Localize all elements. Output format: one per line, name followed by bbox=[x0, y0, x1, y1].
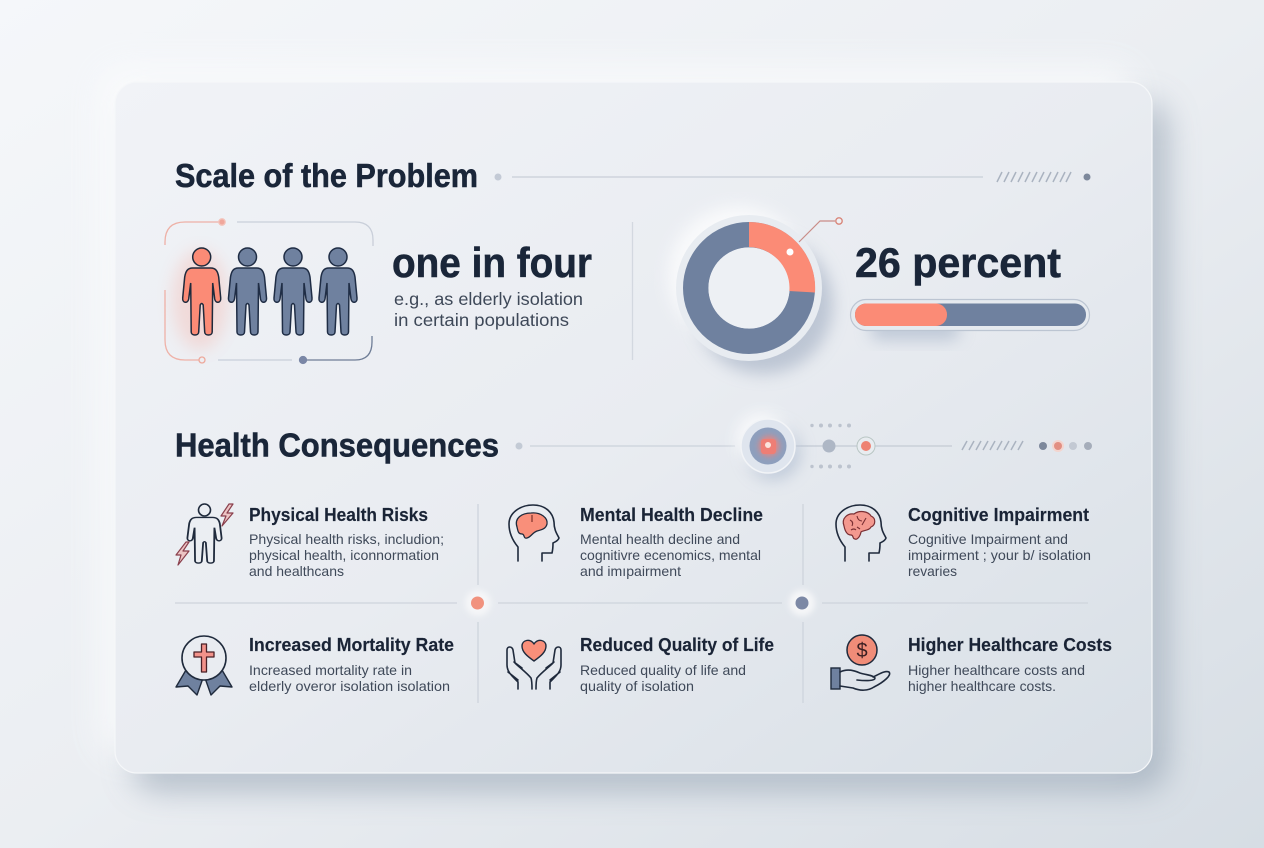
item description: impairment ; your b/ isolation bbox=[908, 547, 1091, 563]
item description bbox=[249, 531, 444, 579]
item description: elderly overor isolation isolation bbox=[249, 678, 450, 694]
item: Increased Mortality Rate bbox=[176, 635, 454, 695]
item title: Cognitive Impairment bbox=[908, 505, 1089, 525]
stat: 26 percent: 26 percent bbox=[855, 239, 1061, 286]
item description: Increased mortality rate in bbox=[249, 662, 412, 678]
icon: head with brain bbox=[509, 505, 559, 561]
item title: Mental Health Decline bbox=[580, 505, 763, 525]
item description: cognitivre ecenomics, mental bbox=[580, 547, 761, 563]
item: Reduced Quality of Life bbox=[507, 635, 774, 694]
item description: Physical health risks, includion; bbox=[249, 531, 444, 547]
item description bbox=[249, 662, 450, 694]
node: slate bbox=[789, 590, 815, 616]
heading: Health Consequences: Health Consequences bbox=[175, 426, 499, 464]
item description: and imıpairment bbox=[580, 563, 681, 579]
item description bbox=[908, 531, 1091, 579]
pictogram frame bbox=[165, 219, 373, 364]
icon: knob bbox=[737, 414, 800, 479]
item description: Reduced quality of life and bbox=[580, 662, 746, 678]
stat description: in certain populations bbox=[394, 310, 569, 330]
icon: hand with dollar coin bbox=[831, 635, 890, 690]
person highlighted bbox=[183, 248, 221, 335]
icon: hands holding heart bbox=[507, 640, 561, 689]
item description bbox=[580, 531, 761, 579]
leader line bbox=[786, 218, 842, 256]
item title: Higher Healthcare Costs bbox=[908, 635, 1112, 655]
icon: person with lightning bolts bbox=[176, 504, 233, 565]
header rule with knob and dots bbox=[516, 414, 1092, 479]
donut chart: 26 percent bbox=[668, 206, 842, 374]
coral slice bbox=[749, 222, 815, 292]
icon: ribbon badge with cross bbox=[176, 636, 232, 695]
item: Mental Health Decline bbox=[509, 505, 763, 579]
stat description bbox=[394, 289, 583, 330]
item description: revaries bbox=[908, 563, 957, 579]
item description: physical health, iconnormation bbox=[249, 547, 439, 563]
person slate 2 bbox=[274, 248, 312, 335]
progress bar bbox=[850, 300, 1090, 340]
item title: Reduced Quality of Life bbox=[580, 635, 774, 655]
item description: and healthcans bbox=[249, 563, 344, 579]
item description: Mental health decline and bbox=[580, 531, 740, 547]
grid dividers and nodes bbox=[175, 504, 1088, 703]
person slate 1 bbox=[228, 248, 267, 335]
item description: higher healthcare costs. bbox=[908, 678, 1056, 694]
panel: main card bbox=[100, 68, 1167, 790]
item: Higher Healthcare Costs bbox=[831, 635, 1112, 694]
icon: hand with dollar coin: $ bbox=[856, 640, 868, 662]
node: coral bbox=[465, 590, 491, 616]
stat: one in four: one in four bbox=[392, 239, 592, 286]
stat description: e.g., as elderly isolation bbox=[394, 289, 583, 309]
item description: quality of isolation bbox=[580, 678, 694, 694]
icon: head with detailed brain bbox=[836, 505, 886, 561]
item title: Physical Health Risks bbox=[249, 505, 428, 525]
item: Physical Health Risks bbox=[176, 504, 444, 579]
item: Cognitive Impairment bbox=[836, 505, 1091, 579]
header rule with hatch marks bbox=[494, 172, 1090, 182]
item description bbox=[908, 662, 1085, 694]
item description: Cognitive Impairment and bbox=[908, 531, 1068, 547]
item description bbox=[580, 662, 746, 694]
item description: Higher healthcare costs and bbox=[908, 662, 1085, 678]
person slate 3 bbox=[319, 248, 357, 335]
heading: Scale of the Problem: Scale of the Problem bbox=[175, 157, 478, 194]
item title: Increased Mortality Rate bbox=[249, 635, 454, 655]
pictogram: one in four people bbox=[165, 219, 373, 364]
